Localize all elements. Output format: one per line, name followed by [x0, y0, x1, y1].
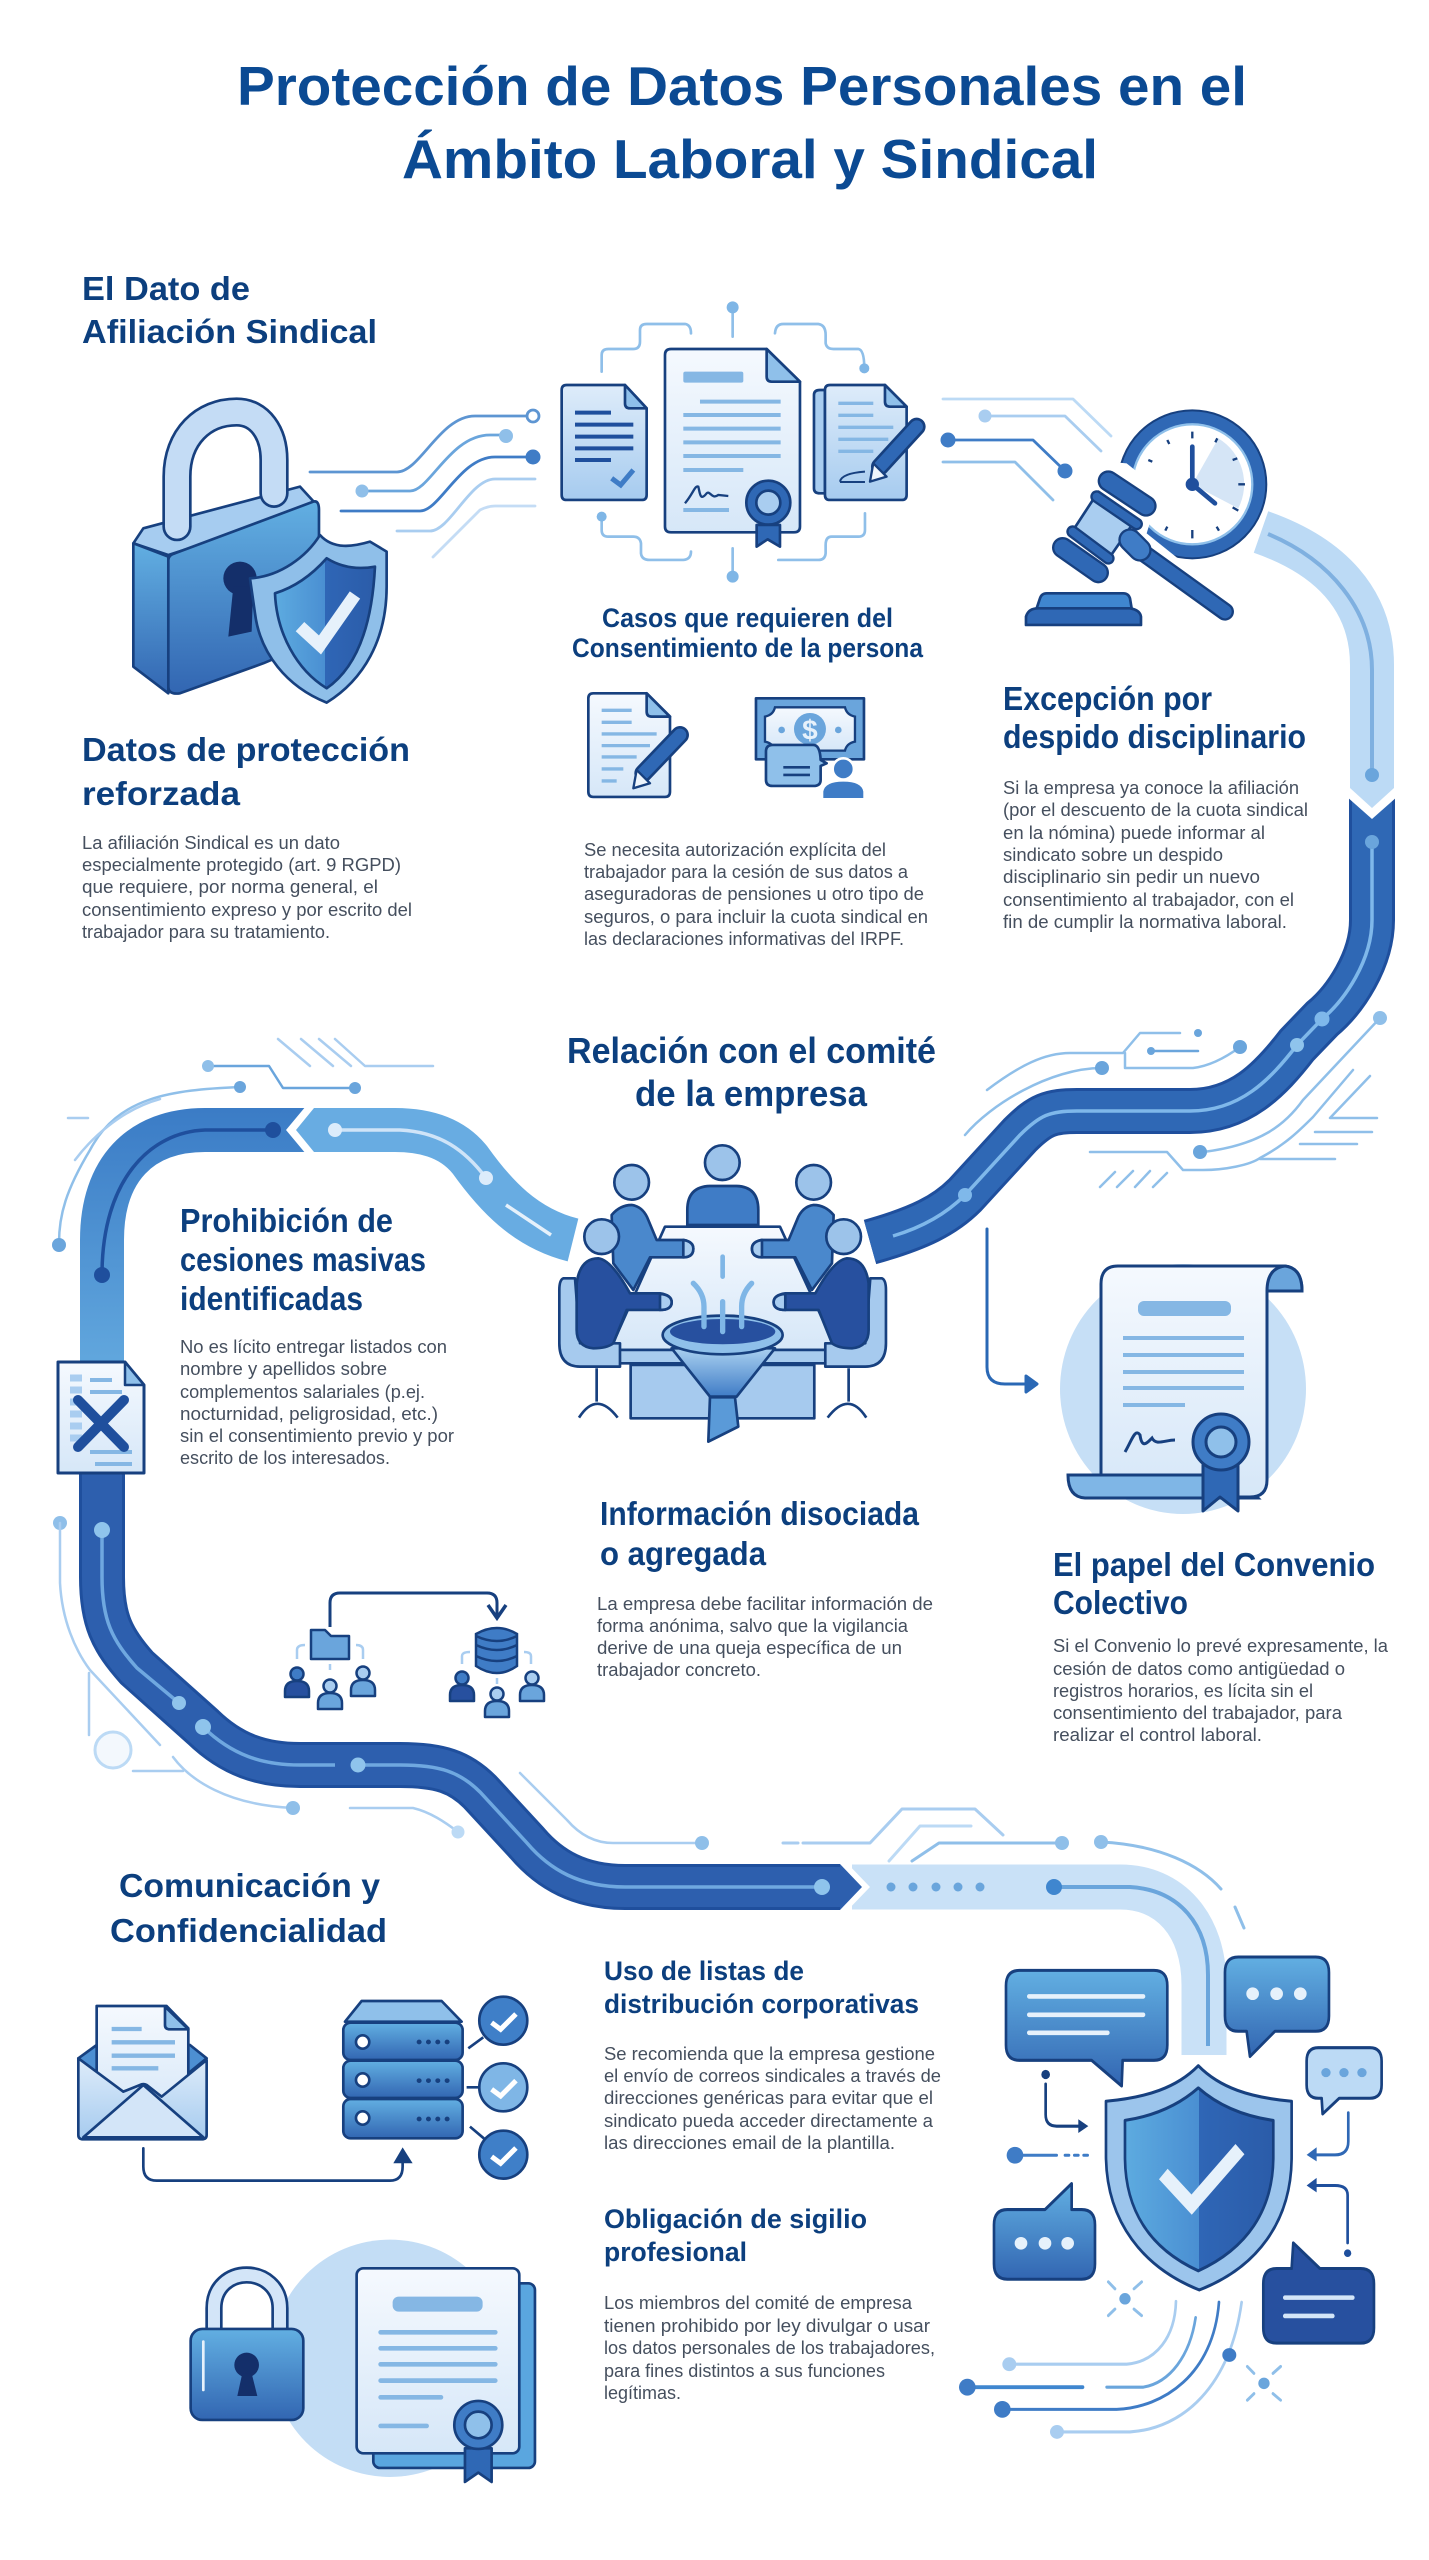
text block: prohibición: No es lícito entregar listados con: [180, 1336, 447, 1357]
heading: El papel del Convenio Colectivo: [1053, 1546, 1375, 1621]
heading: Información disociada o agregada: Información disociada: [600, 1495, 920, 1532]
text block: excepción: disciplinario sin pedir un nuevo: [1003, 866, 1260, 887]
flow ribbon: light arc at top right: [1261, 532, 1398, 819]
text block: autorización explícita: seguros, o para incluir la cuota sindical en: [584, 906, 928, 927]
server rack: [343, 2001, 485, 2139]
icon: three documents with connectors: [562, 301, 917, 798]
money and person icon: [756, 698, 864, 798]
seated people left: [559, 1165, 693, 1418]
heading: Prohibición de cesiones masivas identificadas: [180, 1202, 426, 1317]
heading: El papel del Convenio Colectivo: Colectivo: [1053, 1584, 1188, 1621]
heading: Datos de protección reforzada: reforzada: [82, 775, 241, 812]
text block: excepción: fin de cumplir la normativa laboral.: [1003, 911, 1287, 932]
heading: Relación con el comité: de la empresa: [635, 1073, 868, 1114]
title: Protección de Datos Personales en el: [237, 55, 1247, 117]
sparkles: [1108, 2282, 1281, 2400]
lower left speech bubble: [994, 2184, 1095, 2279]
heading: Excepción por despido disciplinario: Excepción por: [1003, 680, 1212, 717]
heading: Excepción por despido disciplinario: [1003, 680, 1306, 755]
flow ribbon: dark lower wave ending in chevron: [94, 1470, 862, 1910]
icon: crossed spreadsheet document: [58, 1362, 144, 1473]
text block: listas de distribución: sindicato pueda acceder directamente a: [604, 2110, 934, 2131]
dark speech bubble: [1263, 2243, 1374, 2343]
gavel base: [1026, 593, 1141, 625]
heading: Información disociada o agregada: [600, 1495, 920, 1572]
heading: El Dato de Afiliación Sindical: El Dato de: [82, 270, 250, 307]
heading: Relación con el comité: Relación con el comité: [567, 1030, 936, 1071]
text block: sigilio profesional: los datos personales de los trabajadores,: [604, 2337, 935, 2358]
text block: excepción: (por el descuento de la cuota sindical: [1003, 799, 1308, 820]
background circle: [271, 2240, 509, 2477]
speech bubble with lines: [1006, 1970, 1167, 2086]
text block: afiliación sindical: [82, 832, 412, 942]
text block: prohibición: sin el consentimiento previo y por: [180, 1425, 454, 1446]
circuit decoration: right of committee: [965, 1011, 1387, 1187]
text block: prohibición: nocturnidad, peligrosidad, etc.): [180, 1403, 438, 1424]
envelope with letter: [78, 2006, 207, 2139]
text block: sigilio profesional: tienen prohibido por ley divulgar o usar: [604, 2315, 930, 2336]
text block: información disociada: forma anónima, salvo que la vigilancia: [597, 1615, 909, 1636]
light speech bubble: [1307, 2048, 1382, 2114]
text block: sigilio profesional: para fines distintos a sus funciones: [604, 2360, 885, 2381]
circuit decoration: upper left: [52, 1039, 433, 1252]
text block: sigilio profesional: [604, 2292, 935, 2403]
icon: committee table with funnel: [559, 1145, 886, 1442]
text block: afiliación sindical: La afiliación Sindical es un dato: [82, 832, 340, 853]
clock: [1118, 410, 1266, 558]
seated people right: [752, 1165, 886, 1418]
heading: Casos que requieren del Consentimiento: [572, 603, 924, 663]
text block: afiliación sindical: que requiere, por norma general, el: [82, 876, 378, 897]
heading: Obligación de sigilio profesional: profesional: [604, 2237, 747, 2267]
circuit lines: documents to gavel: [940, 399, 1111, 500]
heading: Uso de listas de distribución corporativas: Uso de listas de: [604, 1956, 804, 1986]
text block: información disociada: La empresa debe facilitar información de: [597, 1593, 933, 1614]
text block: autorización explícita: Se necesita autorización explícita del: [584, 839, 886, 860]
heading: Obligación de sigilio profesional: Obligación de sigilio: [604, 2204, 867, 2234]
text block: prohibición: [180, 1336, 454, 1468]
flow ribbon: dark descending to committee table: [870, 797, 1379, 1242]
text block: convenio: consentimiento del trabajador, para: [1053, 1702, 1343, 1723]
heading: Uso de listas de distribución corporativas: distribución corporativas: [604, 1989, 919, 2019]
flow ribbon: mid blue from table to chevron: [286, 1106, 573, 1240]
heading: El Dato de Afiliación Sindical: Afiliación Sindical: [82, 313, 377, 350]
heading: Prohibición de cesiones masivas identificadas: Prohibición de: [180, 1202, 393, 1239]
curved circuit lines under shield: [959, 2301, 1242, 2439]
text block: excepción: sindicato sobre un despido: [1003, 844, 1223, 865]
text block: autorización explícita: aseguradoras de pensiones u otro tipo de: [584, 883, 924, 904]
text block: excepción: Si la empresa ya conoce la afiliación: [1003, 777, 1299, 798]
left document with check: [562, 385, 647, 500]
text block: afiliación sindical: consentimiento expreso y por escrito del: [82, 899, 412, 920]
heading: El papel del Convenio Colectivo: El papel del Convenio: [1053, 1546, 1375, 1583]
text block: prohibición: complementos salariales (p.ej.: [180, 1381, 425, 1402]
text block: excepción: consentimiento al trabajador, con el: [1003, 889, 1294, 910]
text block: excepción: en la nómina) puede informar al: [1003, 822, 1265, 843]
text block: sigilio profesional: Los miembros del comité de empresa: [604, 2292, 913, 2313]
icon: gavel and clock: [1026, 410, 1266, 627]
icon: Convenio scroll certificate: [1060, 1264, 1306, 1514]
arrows toward shield: [1007, 2070, 1351, 2257]
text block: autorización explícita: [584, 839, 928, 949]
text block: excepción: [1003, 777, 1308, 932]
arrow from email to server: [143, 2147, 413, 2181]
heading: Comunicación y Confidencialidad: [110, 1867, 387, 1949]
text block: convenio: realizar el control laboral.: [1053, 1724, 1262, 1745]
text block: convenio: registros horarios, es lícita sin el: [1053, 1680, 1313, 1701]
heading: Relación con el comité: [567, 1030, 936, 1114]
connector arrow to Convenio: [987, 1229, 1037, 1392]
text block: información disociada: derive de una queja específica de un: [597, 1637, 902, 1658]
text block: convenio: [1053, 1635, 1389, 1745]
heading: Comunicación y Confidencialidad: Confidencialidad: [110, 1912, 387, 1949]
circuit decoration: lower left: [53, 1516, 709, 1850]
main shield: [1106, 2066, 1292, 2290]
text block: convenio: cesión de datos como antigüedad o: [1053, 1658, 1345, 1679]
circuit lines: lock to documents: [310, 410, 540, 557]
text block: listas de distribución: el envío de correos sindicales a través de: [604, 2065, 941, 2086]
flow ribbon: lightest arc into the shield: [844, 1860, 1208, 2055]
text block: prohibición: nombre y apellidos sobre: [180, 1358, 387, 1379]
speech bubble with dots: [1225, 1957, 1329, 2057]
table base: [631, 1365, 814, 1418]
icons: email, server and padlock with document: [78, 1997, 535, 2482]
central certificate document: [665, 349, 800, 547]
icon: shield with speech bubbles: [959, 1957, 1382, 2439]
circuit decoration: above the light ribbon: [783, 1809, 1244, 1928]
text block: información disociada: trabajador concreto.: [597, 1659, 761, 1680]
text block: listas de distribución: [604, 2043, 941, 2153]
text block: afiliación sindical: especialmente protegido (art. 9 RGPD): [82, 854, 401, 875]
table top: [608, 1227, 838, 1363]
text block: listas de distribución: las direcciones email de la plantilla.: [604, 2132, 895, 2153]
icon: padlock with shield: [133, 412, 387, 703]
heading: Prohibición de cesiones masivas identificadas: identificadas: [180, 1280, 363, 1317]
heading: El Dato de Afiliación Sindical: [82, 270, 377, 350]
text block: listas de distribución: direcciones genéricas para evitar que el: [604, 2087, 933, 2108]
check badges: [479, 1997, 527, 2179]
connectors around documents: [597, 301, 869, 583]
money and person icon: $: [802, 714, 818, 745]
heading: Información disociada o agregada: o agregada: [600, 1535, 767, 1572]
heading: Casos que requieren del Consentimiento: Consentimiento de la persona: [572, 633, 924, 663]
gavel: [1043, 460, 1230, 627]
funnel: [663, 1283, 783, 1442]
heading: Prohibición de cesiones masivas identificadas: cesiones masivas: [180, 1241, 426, 1278]
text block: sigilio profesional: legítimas.: [604, 2382, 681, 2403]
title: [237, 55, 1247, 190]
text block: prohibición: escrito de los interesados.: [180, 1447, 390, 1468]
heading: Excepción por despido disciplinario: despido disciplinario: [1003, 718, 1306, 755]
heading: Obligación de sigilio profesional: [604, 2204, 867, 2267]
icon: folder and database with people: [285, 1593, 544, 1717]
heading: Casos que requieren del Consentimiento: Casos que requieren del: [602, 603, 893, 633]
heading: Datos de protección reforzada: [82, 731, 410, 812]
right document with pen: [814, 385, 917, 500]
text block: autorización explícita: trabajador para la cesión de sus datos a: [584, 861, 909, 882]
back person: [687, 1145, 758, 1225]
text block: autorización explícita: las declaraciones informativas del IRPF.: [584, 928, 904, 949]
text block: listas de distribución: Se recomienda que la empresa gestione: [604, 2043, 935, 2064]
heading: Uso de listas de distribución corporativas: [604, 1956, 919, 2019]
heading: Datos de protección reforzada: Datos de protección: [82, 731, 410, 768]
document with seal: [357, 2268, 535, 2482]
padlock: [191, 2275, 303, 2420]
flow ribbon: blue arc descending on the left: [94, 1122, 306, 1370]
text block: convenio: Si el Convenio lo prevé expresamente, la: [1053, 1635, 1389, 1656]
title: Ámbito Laboral y Sindical: [402, 128, 1098, 190]
text block: información disociada: [597, 1593, 933, 1680]
heading: Comunicación y Confidencialidad: Comunicación y: [119, 1867, 381, 1904]
text block: afiliación sindical: trabajador para su tratamiento.: [82, 921, 330, 942]
small document with pen: [588, 693, 680, 797]
